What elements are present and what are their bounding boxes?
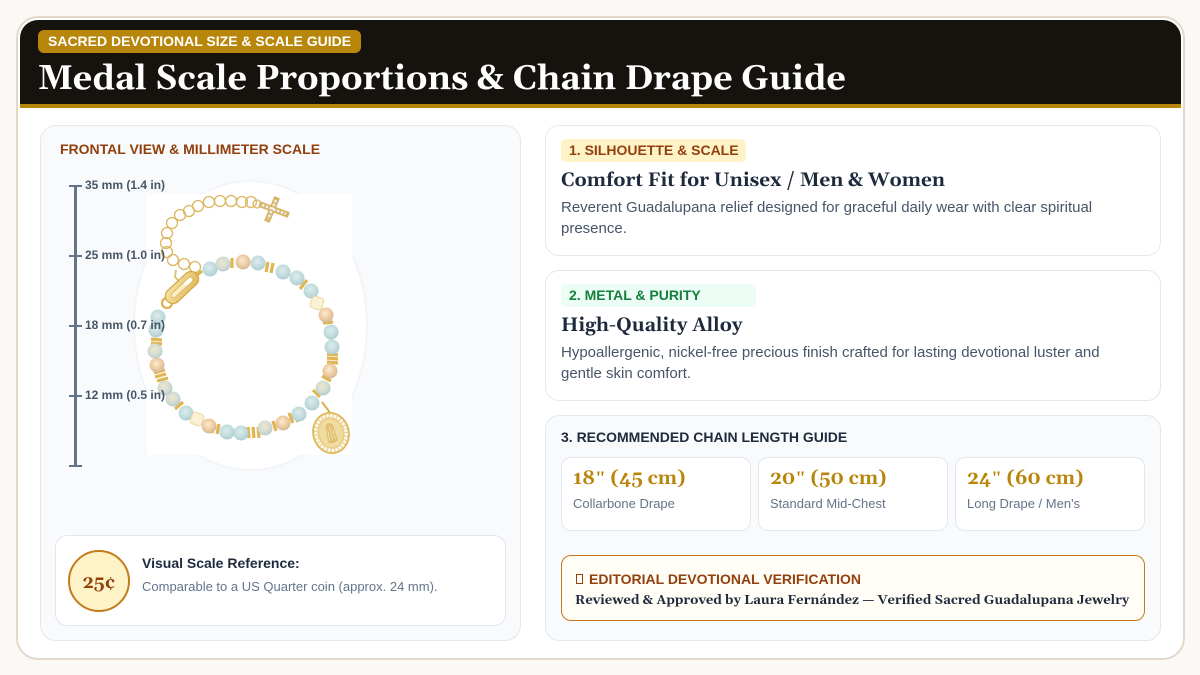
section heading: 3. RECOMMENDED CHAIN LENGTH GUIDE: [561, 429, 847, 445]
callout text: Reviewed & Approved by Laura Fernández — Verified Sacred Guadalupana Jewelry: [575, 593, 1129, 609]
panel heading: FRONTAL VIEW & MILLIMETER SCALE: [60, 141, 320, 157]
coin heading: Visual Scale Reference:: [142, 555, 300, 571]
card: silhouette and scale: [545, 125, 1161, 256]
label 35 mm: 35 mm (1.4 in): [85, 178, 165, 192]
spacer beads: [151, 258, 338, 438]
panel: chain length guide: [545, 415, 1161, 641]
length card 24: 24" (60 cm): [967, 467, 1083, 491]
coin description: Comparable to a US Quarter coin (approx. 24 mm).: [142, 579, 438, 594]
label 25 mm: 25 mm (1.0 in): [85, 248, 165, 262]
cross charm: [262, 200, 286, 219]
icon: quarter coin: [68, 550, 130, 612]
icon: missing glyph box: [576, 574, 583, 584]
panel: frontal view and scale: [40, 125, 521, 641]
length card 18: Collarbone Drape: [573, 496, 675, 511]
length card 20: [758, 457, 948, 531]
verification callout: [561, 555, 1145, 621]
tag: 1. SILHOUETTE & SCALE: [569, 142, 739, 158]
icon: quarter coin: 25¢: [83, 572, 115, 595]
card: metal and purity: [545, 270, 1161, 401]
label 12 mm: 12 mm (0.5 in): [85, 388, 165, 402]
length card 18: 18" (45 cm): [573, 467, 685, 491]
badge: [38, 30, 361, 53]
description: presence.: [561, 220, 627, 237]
extender chain: [160, 196, 261, 272]
description: Reverent Guadalupana relief designed for graceful daily wear with clear spiritual: [561, 199, 1092, 216]
description: gentle skin comfort.: [561, 365, 691, 382]
length card 20: Standard Mid-Chest: [770, 496, 886, 511]
header banner: [20, 20, 1181, 108]
tag: [561, 139, 746, 162]
length card 18: [561, 457, 751, 531]
length card 24: [955, 457, 1145, 531]
product image: white backdrop: [147, 194, 352, 455]
scale ruler: [69, 178, 165, 467]
title: Medal Scale Proportions & Chain Drape Guide: [38, 57, 846, 101]
description: Hypoallergenic, nickel-free precious finish crafted for lasting devotional luster and: [561, 344, 1100, 361]
coin reference card: [55, 535, 506, 626]
badge: SACRED DEVOTIONAL SIZE & SCALE GUIDE: [48, 33, 351, 49]
medal pendant: [306, 397, 353, 457]
gemstone beads: [148, 254, 340, 440]
callout label: EDITORIAL DEVOTIONAL VERIFICATION: [589, 571, 861, 587]
length card 20: 20" (50 cm): [770, 467, 887, 491]
heading: Comfort Fit for Unisex / Men & Women: [561, 169, 945, 193]
lobster clasp: [162, 268, 202, 308]
tag: [561, 284, 756, 307]
label 18 mm: 18 mm (0.7 in): [85, 318, 165, 332]
heading: High-Quality Alloy: [561, 314, 742, 338]
description: [561, 199, 1092, 237]
halo ellipse: [133, 180, 368, 471]
description: [561, 344, 1100, 382]
tag: 2. METAL & PURITY: [569, 287, 701, 303]
length card 24: Long Drape / Men's: [967, 496, 1080, 511]
